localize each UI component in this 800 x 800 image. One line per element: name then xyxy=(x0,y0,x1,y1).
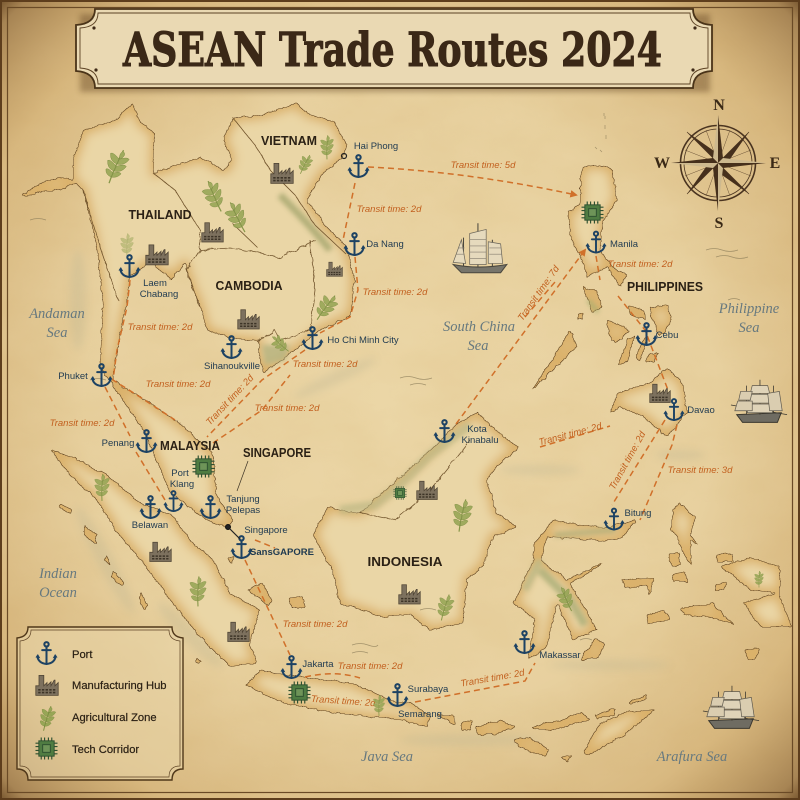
ship: galleon in Arafura Sea xyxy=(703,686,759,728)
land: Lesser Sunda islands xyxy=(435,694,655,763)
route: Phuket to Port Klang xyxy=(50,387,165,500)
port: Singapore: Singapore xyxy=(244,525,288,536)
port: Phuket: Phuket xyxy=(58,371,88,382)
port: Penang xyxy=(102,430,158,452)
country labels: INDONESIA xyxy=(368,554,443,569)
port: Cebu xyxy=(635,323,678,345)
country labels: VIETNAM xyxy=(261,133,317,148)
country labels: PHILIPPINES xyxy=(627,279,703,294)
route: Laem Chabang to Malaysia xyxy=(113,280,211,420)
land: Luzon xyxy=(568,165,627,287)
sea labels: Arafura Sea xyxy=(656,749,727,765)
compass rose xyxy=(654,97,780,232)
port: Port Klang xyxy=(163,468,194,511)
route: Laem Chabang to Malaysia: Transit time: 2d xyxy=(128,322,193,333)
sea labels: Java Sea xyxy=(361,749,413,765)
land: Java xyxy=(245,670,430,727)
country labels: THAILAND xyxy=(128,207,192,222)
compass letters: N xyxy=(713,97,725,114)
sea labels: Sea xyxy=(739,320,759,336)
route: Jakarta to Surabaya: Transit time: 2d xyxy=(338,661,403,672)
compass letters: S xyxy=(715,215,724,232)
route: Da Nang to Ho Chi Minh City xyxy=(320,257,428,333)
legend item: manufacturing hub: Manufacturing Hub xyxy=(72,680,167,692)
port: Makassar xyxy=(513,631,581,661)
port: Cebu: Cebu xyxy=(656,330,678,341)
land: Sulawesi xyxy=(513,520,637,660)
land: Sumatra xyxy=(50,450,260,667)
route: Hai Phong to Da Nang: Transit time: 2d xyxy=(357,204,422,215)
route: Manila to Cebu to Davao: Transit time: 2d xyxy=(608,259,673,270)
land: Maluku and Halmahera xyxy=(620,503,760,660)
port: Bitung xyxy=(603,508,651,530)
sea labels: Sea xyxy=(47,325,67,341)
route: Da Nang to Ho Chi Minh City: Transit time: 2d xyxy=(363,287,428,298)
legend item: manufacturing hub xyxy=(36,675,167,695)
green land tints xyxy=(262,195,615,625)
route: Kota Kinabalu to Davao: Transit time: 2d xyxy=(538,421,604,448)
chip icons: tech corridors xyxy=(192,201,604,704)
route: Hai Phong to Manila xyxy=(368,160,576,195)
port: Tanjung Pelepas: Pelepas xyxy=(226,505,260,516)
port: Port Klang: Port xyxy=(171,468,189,479)
port: Phuket xyxy=(58,364,113,386)
route: Davao to Bitung xyxy=(607,420,665,505)
port: Manila: Manila xyxy=(610,239,639,250)
route: Laem Chabang to Malaysia: Transit time: 2d xyxy=(146,379,211,390)
route: Jakarta to Surabaya: Transit time: 2d xyxy=(310,694,377,709)
port: Tanjung Pelepas xyxy=(199,494,260,518)
route: Surabaya to Makassar: Transit time: 2d xyxy=(460,667,526,690)
legend item: port xyxy=(35,642,93,664)
route: Jakarta to Surabaya xyxy=(305,661,403,709)
port: Laem Chabang xyxy=(118,255,178,300)
port: Sihanoukville xyxy=(204,336,260,372)
route: Surabaya to Makassar xyxy=(415,663,535,702)
route: Davao to Bitung east: Transit time: 3d xyxy=(668,465,733,476)
port: Davao xyxy=(663,399,715,420)
port: Kota Kinabalu: Kinabalu xyxy=(462,435,498,446)
leaf icons: agricultural zones xyxy=(95,135,764,716)
land: Visayas, Mindoro and Palawan xyxy=(530,287,671,393)
country labels: SINGAPORE xyxy=(243,445,311,460)
port: Singapore xyxy=(226,524,314,558)
port: Port Klang: Klang xyxy=(170,479,194,490)
sea shading xyxy=(70,250,705,746)
country labels: MALAYSIA xyxy=(160,438,221,453)
route: Singapore to Jakarta: Transit time: 2d xyxy=(283,619,348,630)
waves and small marks xyxy=(30,113,748,653)
port: Surabaya xyxy=(386,684,449,720)
port: Surabaya: Semarang xyxy=(398,709,442,720)
route: Davao to Bitung east xyxy=(640,425,733,520)
port: Jakarta: Jakarta xyxy=(302,659,334,670)
land: small islands xyxy=(58,503,605,664)
landmasses xyxy=(20,103,792,763)
sea labels: Indian xyxy=(38,566,77,582)
land: Thailand, Vietnam and Indochina xyxy=(20,103,355,528)
port: Kota Kinabalu: Kota xyxy=(467,424,487,435)
route: Phuket to Port Klang: Transit time: 2d xyxy=(50,418,115,429)
port: Ho Chi Minh City: Ho Chi Minh City xyxy=(327,335,399,346)
port: Singapore: SansGAPORE xyxy=(250,547,314,558)
legend item: tech corridor: Tech Corridor xyxy=(72,744,139,756)
port: Da Nang: Da Nang xyxy=(366,239,404,250)
port: Ho Chi Minh City xyxy=(301,327,399,349)
land: Mindanao xyxy=(610,367,687,437)
route: Ho Chi Minh City to Singapore: Transit time: 2d xyxy=(293,359,358,370)
port: Laem Chabang: Chabang xyxy=(140,289,178,300)
route: Hai Phong to Manila: Transit time: 5d xyxy=(451,160,516,171)
port: Belawan xyxy=(132,496,168,531)
legend item: port: Port xyxy=(72,649,93,661)
sea labels: Sea xyxy=(468,338,488,354)
port: Sihanoukville: Sihanoukville xyxy=(204,361,260,372)
route: Manila to Kota Kinabalu xyxy=(456,250,585,424)
sea labels xyxy=(28,301,780,765)
compass letters xyxy=(654,97,780,232)
title banner xyxy=(76,9,712,92)
ship: junk in South China Sea xyxy=(453,223,507,273)
port: Hai Phong: Hai Phong xyxy=(354,141,398,152)
trade routes with transit time labels xyxy=(50,160,733,709)
route: Sihanoukville to Malaysia: Transit time: 2d xyxy=(204,372,257,428)
route: Sihanoukville to Malaysia xyxy=(204,372,320,443)
legend item: tech corridor xyxy=(35,737,139,760)
port: Bitung: Bitung xyxy=(625,508,651,519)
compass letters: E xyxy=(770,155,780,172)
legend item: agricultural zone xyxy=(37,704,157,733)
port: Makassar: Makassar xyxy=(539,650,581,661)
port: Tanjung Pelepas: Tanjung xyxy=(226,494,260,505)
route: Singapore to Jakarta xyxy=(245,540,348,655)
border lines between countries xyxy=(83,118,470,520)
port: Da Nang xyxy=(343,233,404,255)
land: New Guinea xyxy=(720,557,792,627)
port: Kota Kinabalu xyxy=(433,420,498,446)
sea labels: Philippine xyxy=(718,301,780,317)
route: Sihanoukville to Malaysia: Transit time: 2d xyxy=(255,403,320,414)
country labels xyxy=(128,133,703,569)
compass letters: W xyxy=(654,155,670,172)
legend panel xyxy=(17,627,183,780)
sea labels: South China xyxy=(443,319,515,335)
port: Jakarta xyxy=(280,656,334,678)
port: Davao: Davao xyxy=(687,405,715,416)
factory icons: manufacturing hubs xyxy=(146,163,670,641)
port: Manila xyxy=(585,232,639,253)
port: Belawan: Belawan xyxy=(132,520,168,531)
sea labels: Andaman xyxy=(28,306,85,322)
route: Manila to Kota Kinabalu: Transit time: 7d xyxy=(516,263,562,323)
port: Hai Phong xyxy=(342,141,398,177)
sea labels: Ocean xyxy=(39,585,77,601)
port: Surabaya: Surabaya xyxy=(408,684,449,695)
land: Borneo xyxy=(313,412,520,630)
route: Ho Chi Minh City to Singapore xyxy=(207,350,358,437)
route: Manila to Cebu to Davao xyxy=(596,256,673,390)
route: Hai Phong to Da Nang xyxy=(343,183,422,240)
port: Penang: Penang xyxy=(102,438,134,449)
country labels: CAMBODIA xyxy=(216,278,283,293)
title text: ASEAN Trade Routes 2024 xyxy=(122,23,662,78)
legend item: agricultural zone: Agricultural Zone xyxy=(72,712,157,724)
ship: galleon in Philippine Sea xyxy=(731,380,787,422)
ports xyxy=(58,141,715,720)
port: Laem Chabang: Laem xyxy=(143,278,167,289)
route: Davao to Bitung: Transit time: 2d xyxy=(607,429,649,492)
